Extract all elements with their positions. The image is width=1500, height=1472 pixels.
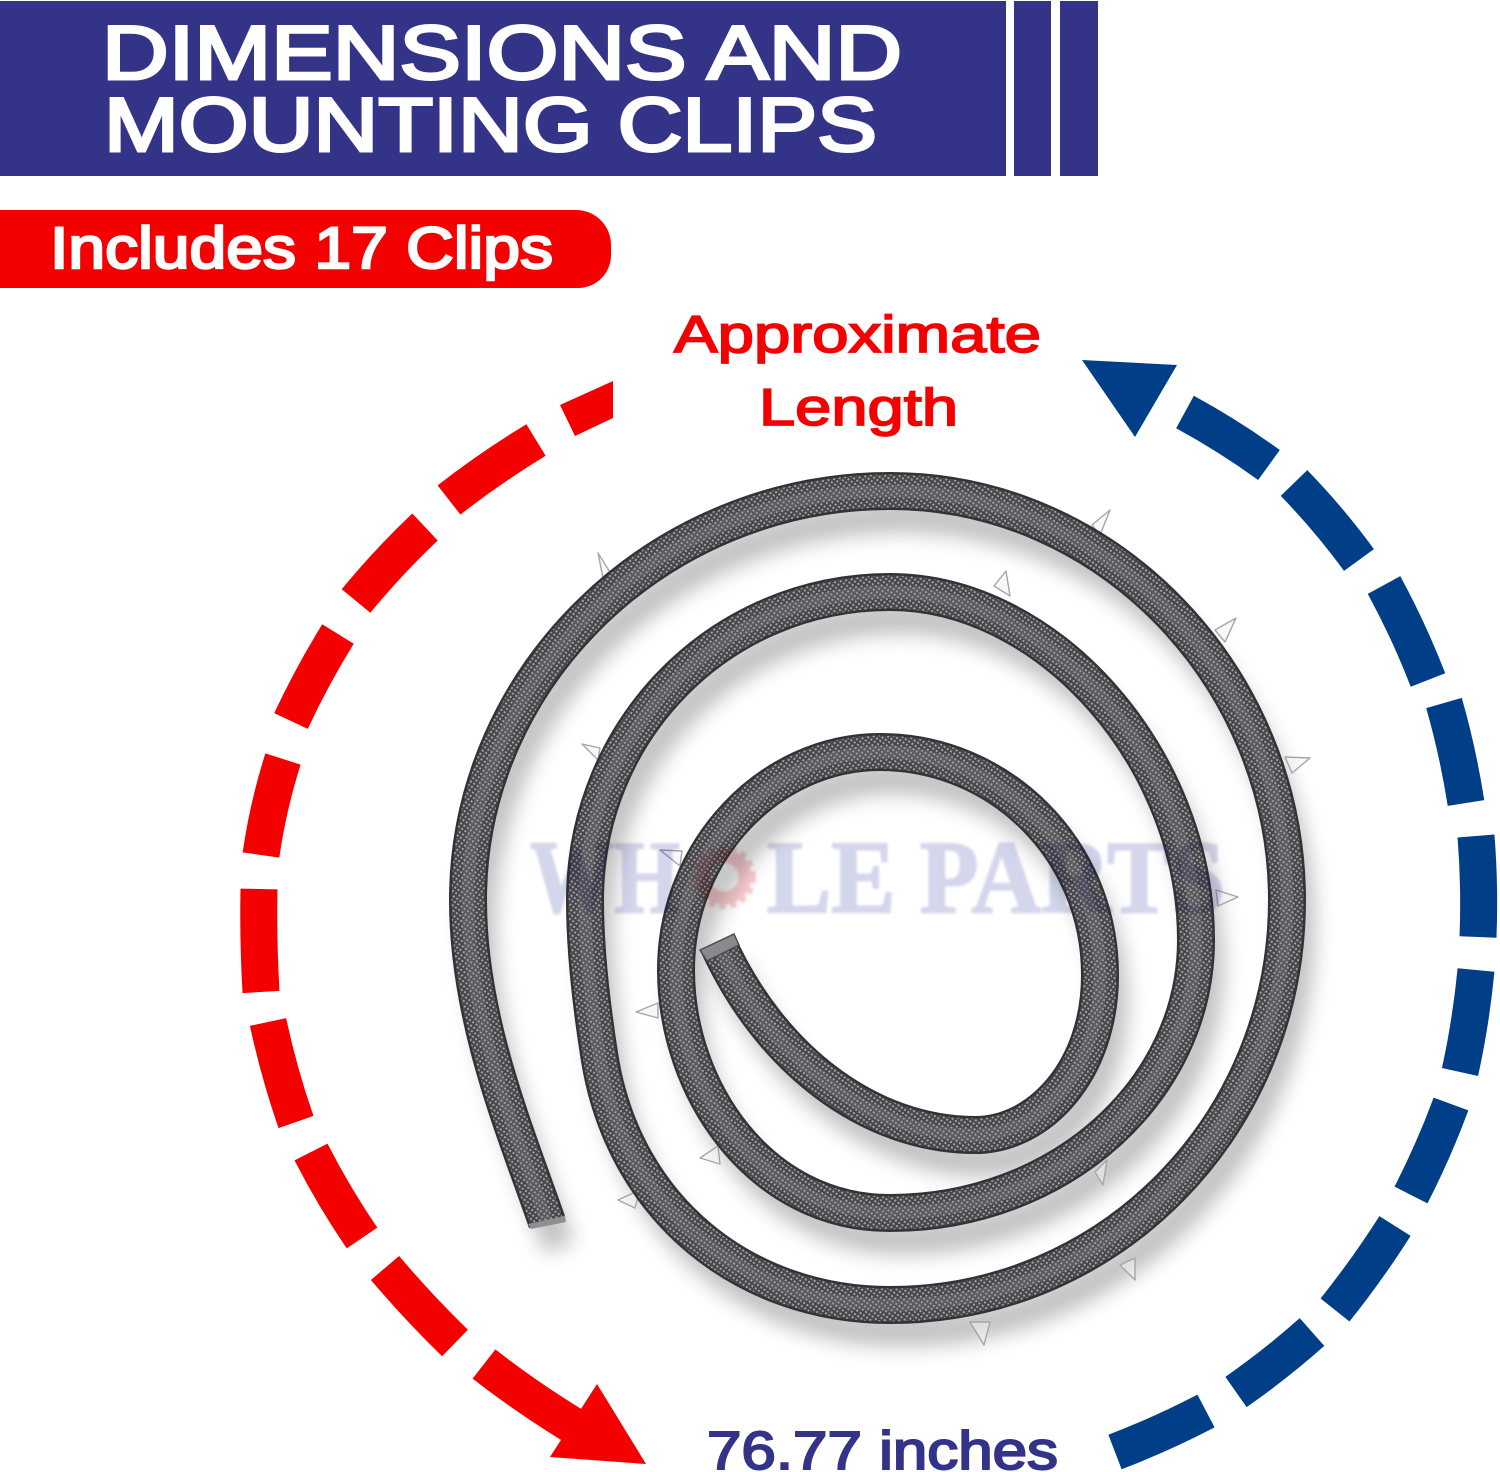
watermark: WH (530, 820, 680, 935)
arrow: blue dashed arc (1082, 360, 1479, 1452)
label: approximate length (674, 306, 1041, 437)
label: approximate length: Approximate (674, 306, 1041, 364)
gasket tube (468, 491, 1287, 1305)
title: MOUNTING CLIPS (104, 83, 877, 168)
mounting clips (582, 510, 1310, 1345)
badge: includes 17 clips (0, 210, 611, 288)
header banner (0, 1, 1098, 176)
title: DIMENSIONS AND (102, 11, 902, 96)
gasket shadow (480, 517, 1299, 1331)
label: approximate length: Length (759, 379, 958, 437)
title (102, 11, 902, 168)
product photo: coiled gasket with mounting clips (468, 491, 1310, 1345)
arrow: red dashed arc (259, 381, 646, 1464)
watermark: LE PARTS (767, 820, 1225, 935)
watermark (530, 820, 1225, 935)
badge: includes 17 clips: Includes 17 Clips (50, 216, 553, 281)
gasket cut ends (700, 934, 739, 961)
